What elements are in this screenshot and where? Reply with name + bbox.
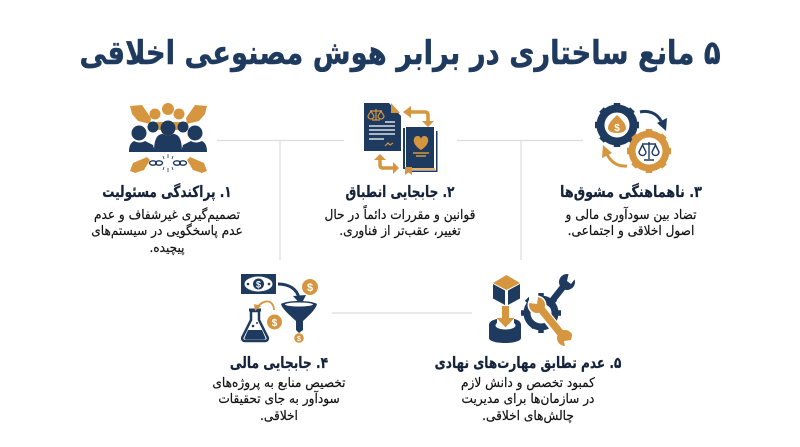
heading: item 3: ۳. ناهماهنگی مشوق‌ها bbox=[560, 183, 702, 201]
icon: box, gear and wrench bbox=[489, 272, 578, 347]
text: item 1 bbox=[91, 207, 243, 256]
heading: item 5: ۵. عدم تطابق مهارت‌های نهادی bbox=[435, 354, 621, 372]
icon: law document and ethics book bbox=[364, 103, 438, 175]
text: item 4: اخلاقی. bbox=[260, 409, 298, 424]
text: item 5: در سازمان‌ها برای مدیریت bbox=[462, 392, 594, 407]
text: item 1: عدم پاسخگویی در سیستم‌های bbox=[91, 224, 243, 239]
text: item 3: تضاد بین سودآوری مالی و bbox=[566, 208, 696, 223]
text: item 1: پیچیده. bbox=[149, 241, 185, 256]
icon: money, funnel and flask: $ bbox=[272, 318, 278, 329]
icon: money gear and scales gear: $ bbox=[614, 123, 620, 134]
text: item 4: سودآور به جای تحقیقات bbox=[218, 392, 340, 407]
text: item 5: کمبود تخصص و دانش لازم bbox=[461, 376, 595, 391]
text: item 3 bbox=[564, 206, 696, 239]
text: item 2: قوانین و مقررات دائماً در حال bbox=[325, 208, 475, 223]
panel: item 4 bbox=[212, 354, 346, 424]
text: item 2 bbox=[325, 205, 475, 239]
panel: item 2 bbox=[325, 183, 475, 239]
text: item 2: تغییر، عقب‌تر از فناوری. bbox=[339, 224, 461, 239]
heading: item 2: ۲. جابجایی انطباق bbox=[346, 183, 454, 201]
panel: item 3 bbox=[560, 182, 702, 239]
panel: item 5 bbox=[435, 354, 622, 424]
icon: money, funnel and flask bbox=[241, 274, 318, 343]
text: item 3: اصول اخلاقی و اجتماعی. bbox=[568, 224, 694, 239]
icon: money gear and scales gear bbox=[595, 103, 671, 173]
text: item 5: چالش‌های اخلاقی. bbox=[482, 409, 574, 424]
text: item 4: تخصیص منابع به پروژه‌های bbox=[212, 376, 346, 391]
icon: money, funnel and flask: $ bbox=[307, 282, 313, 294]
panel: item 1 bbox=[91, 182, 243, 256]
title: ۵ مانع ساختاری در برابر هوش مصنوعی اخلاقی bbox=[79, 33, 721, 72]
icon: money, funnel and flask: $ bbox=[297, 336, 301, 343]
heading: item 1: ۱. پراکندگی مسئولیت bbox=[102, 183, 232, 201]
text: item 5 bbox=[461, 376, 595, 424]
icon: people and broken chain bbox=[129, 103, 207, 173]
icon: money, funnel and flask: $ bbox=[256, 280, 261, 290]
heading: item 4: ۴. جابجایی مالی bbox=[230, 354, 328, 372]
text: item 4 bbox=[212, 376, 346, 424]
text: item 1: تصمیم‌گیری غیرشفاف و عدم bbox=[94, 208, 240, 223]
